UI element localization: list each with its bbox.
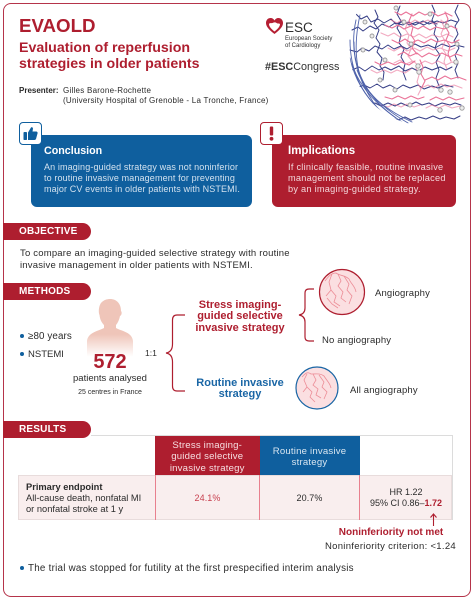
heading: objective: OBJECTIVE (19, 226, 77, 237)
presenter: (University Hospital of Grenoble - La Tronche, France) (63, 96, 269, 105)
icon: exclamation (260, 122, 283, 145)
implications text: management should not be replaced (288, 173, 446, 183)
presenter: Gilles Barone-Rochette (63, 86, 151, 95)
no angiography label: No angiography (322, 335, 391, 346)
endpoint label: or nonfatal stroke at 1 y (26, 504, 123, 514)
objective text (20, 248, 290, 271)
presenter (19, 86, 269, 105)
implications text: by an imaging-guided strategy. (288, 184, 421, 194)
heading: objective (3, 223, 91, 240)
implications text: If clinically feasible, routine invasive (288, 162, 443, 172)
conclusion text: to routine invasive management for preventing (44, 173, 235, 183)
table outlines (91, 435, 453, 436)
endpoint label: Primary endpoint (26, 482, 102, 492)
ESC wordmark: ESC (285, 20, 313, 35)
header: routine arm: Routine invasive (273, 446, 346, 456)
stress arm value: 24.1% (194, 492, 221, 502)
header: stress arm: invasive strategy (170, 463, 245, 474)
congress hashtag: #ESCCongress (265, 61, 339, 73)
title: EVAOLD (19, 15, 95, 36)
stress arm label (195, 299, 285, 334)
hazard ratio: 95% CI 0.86–1.72 (370, 498, 442, 508)
all angiography label: All angiography (350, 385, 418, 396)
subtitle (19, 40, 200, 72)
panel: conclusion (19, 122, 252, 207)
population bullets: NSTEMI (28, 349, 64, 360)
noninferiority criterion: Noninferiority criterion: <1.24 (325, 540, 456, 552)
hazard ratio (370, 486, 442, 508)
angiography label: Angiography (375, 288, 430, 299)
heading: methods: METHODS (19, 286, 70, 297)
stress arm label: Stress imaging- (199, 299, 281, 311)
centres label: 25 centres in France (78, 388, 142, 396)
stress arm label: guided selective (197, 310, 283, 322)
noninferiority verdict: Noninferiority not met (339, 527, 443, 538)
header: routine arm: strategy (292, 457, 327, 468)
conclusion text (44, 162, 240, 194)
society name (285, 36, 332, 49)
panel: implications (260, 122, 456, 207)
objective text: invasive management in older patients with NSTEMI. (20, 260, 253, 271)
header: routine arm (260, 436, 360, 475)
implications heading: Implications (288, 145, 355, 157)
header: stress arm: guided selective (171, 451, 243, 462)
stress arm label: invasive strategy (195, 322, 285, 334)
patients label: patients analysed (73, 373, 147, 384)
patient count: 572 (93, 351, 127, 373)
heading: methods (3, 283, 91, 300)
icon: patient silhouette (87, 299, 133, 354)
routine arm label: Routine invasive (196, 377, 284, 389)
stress arm bracket (298, 288, 314, 342)
conclusion text: major CV events in older patients with NSTEMI. (44, 184, 240, 194)
subtitle: strategies in older patients (19, 56, 200, 72)
results table (18, 435, 453, 520)
presenter: Presenter: (19, 86, 59, 95)
subtitle: Evaluation of reperfusion (19, 40, 190, 56)
routine arm label: strategy (219, 388, 261, 400)
hazard ratio: HR 1.22 (389, 486, 423, 496)
endpoint label (26, 482, 141, 514)
population bullets (20, 331, 72, 360)
icon: heart (266, 18, 283, 34)
heading: results: RESULTS (19, 424, 66, 435)
arrow: up to upper CI (430, 513, 437, 526)
row: primary endpoint (18, 475, 452, 520)
randomisation bracket (166, 314, 185, 392)
sphere illustration of coronary vessels (350, 4, 466, 124)
conclusion text: An imaging-guided strategy was not noninferior (44, 162, 238, 172)
conclusion heading: Conclusion (44, 145, 102, 157)
header: stress arm (155, 436, 260, 475)
conclusion box (31, 135, 252, 207)
icon: angiogram circle blue (295, 366, 339, 410)
routine arm label (196, 377, 284, 400)
implications text (288, 162, 446, 194)
population bullets: ≥80 years (28, 331, 72, 342)
icon: angiogram circle red (318, 268, 366, 316)
routine arm value: 20.7% (296, 492, 323, 502)
endpoint label: All-cause death, nonfatal MI (26, 493, 141, 503)
randomisation ratio: 1:1 (145, 348, 157, 358)
icon: thumbs up (19, 122, 42, 145)
society name: European Society (285, 36, 332, 42)
society name: of Cardiology (285, 43, 320, 49)
heading: results (3, 421, 91, 438)
ESC logo (266, 18, 332, 49)
implications box (272, 135, 456, 207)
column dividers (154, 475, 156, 520)
header: stress arm: Stress imaging- (172, 440, 242, 450)
objective text: To compare an imaging-guided selective strategy with routine (20, 248, 290, 259)
futility note: The trial was stopped for futility at the first prespecified interim analysis (28, 563, 354, 574)
